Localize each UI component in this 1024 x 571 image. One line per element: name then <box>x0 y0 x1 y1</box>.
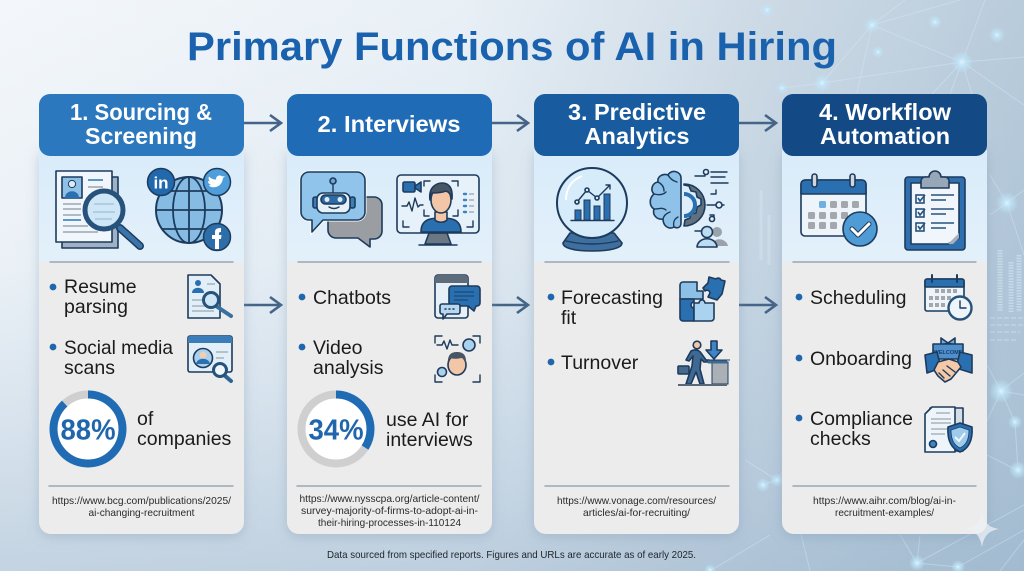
bullet: video analysis <box>299 337 384 379</box>
stat label: of companies <box>137 408 232 450</box>
heading: predictive analytics: 3. Predictive <box>568 99 706 125</box>
icon: chatbot speech bubbles <box>301 172 382 247</box>
stat: 34 percent donut: 34% <box>308 414 364 446</box>
bullet: video analysis: analysis <box>313 357 384 379</box>
arrow: lower step 2 to 3 <box>492 297 528 313</box>
badge: facebook <box>204 224 230 250</box>
stat label: of companies: of <box>137 408 154 430</box>
stat label: use AI for interviews <box>386 409 473 451</box>
heading: predictive analytics <box>534 94 739 156</box>
icon: resume under magnifier <box>56 171 140 248</box>
bullet: compliance checks: Compliance <box>810 408 913 430</box>
icon: sparkle watermark <box>965 511 999 547</box>
heading: predictive analytics: Analytics <box>584 123 690 149</box>
source url: bcg: https://www.bcg.com/publications/2025/ <box>52 496 231 507</box>
source url: aihr <box>813 496 956 519</box>
icon: chat window <box>435 275 480 319</box>
bullet: resume parsing: Resume <box>64 276 137 298</box>
panel: interviews <box>287 94 492 534</box>
icon: person leaving desk <box>678 341 730 385</box>
source url: bcg: ai-changing-recruitment <box>88 508 195 519</box>
icon: crystal ball chart <box>557 168 627 251</box>
bullet: forecasting fit: Forecasting <box>561 287 663 309</box>
title: Primary Functions of AI in Hiring <box>187 25 837 69</box>
stat label: use AI for interviews: interviews <box>386 429 473 451</box>
source url: nysscpa <box>300 494 480 529</box>
source url: aihr: recruitment-examples/ <box>835 508 934 519</box>
stat: 88 percent donut <box>54 394 122 464</box>
arrow: step 1 to 2 <box>244 115 281 131</box>
icon: globe with social badges <box>148 168 230 250</box>
source url: vonage: articles/ai-for-recruiting/ <box>583 508 690 519</box>
bullet: turnover: Turnover <box>561 352 639 374</box>
icon: puzzle pieces <box>680 277 725 321</box>
stat: 34 percent donut <box>302 394 370 464</box>
bullet: social media scans <box>50 337 173 379</box>
icon: calendar with clock <box>925 275 972 320</box>
arrow: step 2 to 3 <box>492 115 528 131</box>
badge: twitter <box>204 168 230 196</box>
bullet: compliance checks: checks <box>810 428 871 450</box>
bullet: social media scans: Social media <box>64 337 173 359</box>
source url: nysscpa: their-hiring-processes-in-110124 <box>318 518 461 529</box>
icon: clipboard checklist <box>905 171 965 250</box>
heading: workflow automation: 4. Workflow <box>819 99 951 125</box>
stat label: of companies: companies <box>137 428 232 450</box>
heading: sourcing <box>39 94 244 156</box>
footer note: Data sourced from specified reports. Figures and URLs are accurate as of early 2025. <box>327 550 696 561</box>
icon: resume search <box>188 275 231 318</box>
stat: 88 percent donut: 88% <box>60 414 116 446</box>
stat label: use AI for interviews: use AI for <box>386 409 469 431</box>
bullet: forecasting fit <box>548 287 663 329</box>
source url: aihr: https://www.aihr.com/blog/ai-in- <box>813 496 956 507</box>
bullet: chatbots: Chatbots <box>313 287 391 309</box>
heading: workflow automation <box>782 94 987 156</box>
heading: sourcing: Screening <box>85 123 197 149</box>
heading: interviews <box>287 94 492 156</box>
panel: sourcing and screening <box>39 94 244 534</box>
arrow: lower step 3 to 4 <box>739 297 776 313</box>
source url: vonage: https://www.vonage.com/resources/ <box>557 496 716 507</box>
bullet: compliance checks <box>796 408 913 450</box>
bullet: resume parsing <box>50 276 137 318</box>
source url: nysscpa: survey-majority-of-firms-to-adopt-ai-in- <box>301 506 478 517</box>
heading: interviews: 2. Interviews <box>318 111 460 137</box>
icon: video interview monitor <box>397 175 479 245</box>
bullet: video analysis: Video <box>313 337 363 359</box>
arrow: step 3 to 4 <box>739 115 776 131</box>
bullet: forecasting fit: fit <box>561 307 577 329</box>
bullet: scheduling: Scheduling <box>810 287 906 309</box>
bullet: onboarding: Onboarding <box>810 348 912 370</box>
icon: brain with gear and team <box>650 170 728 247</box>
bullet: social media scans: scans <box>64 357 115 379</box>
icon: social profile search <box>188 336 232 381</box>
icon: calendar with check <box>801 174 877 246</box>
arrow: lower step 1 to 2 <box>244 297 281 313</box>
source url: vonage <box>557 496 716 519</box>
panel: predictive analytics <box>534 94 739 534</box>
badge: linkedin: in <box>153 174 169 192</box>
heading: sourcing: 1. Sourcing & <box>70 99 212 125</box>
icon: document with shield <box>925 407 972 452</box>
icon: face analysis <box>435 336 480 382</box>
source url: bcg <box>52 496 231 519</box>
icon: welcome handshake <box>925 338 972 382</box>
bullet: resume parsing: parsing <box>64 296 128 318</box>
panel: workflow automation <box>782 94 987 534</box>
source url: nysscpa: https://www.nysscpa.org/article-content/ <box>300 494 480 505</box>
heading: workflow automation: Automation <box>820 123 950 149</box>
icon: welcome handshake: WELCOME <box>934 350 963 356</box>
